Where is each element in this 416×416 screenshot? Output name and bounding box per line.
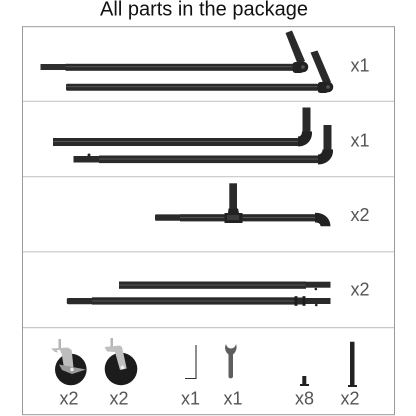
panel: small parts <box>51 338 360 408</box>
quantity: x2 <box>110 388 129 408</box>
panel: elbow pipes <box>53 108 370 164</box>
lower angled pipe <box>66 50 333 93</box>
upper elbow pipe <box>53 108 312 146</box>
icon: long bolt <box>348 342 357 387</box>
panel: angled pipes <box>40 30 370 93</box>
quantity: x2 <box>340 388 360 408</box>
quantity: x1 <box>350 131 370 151</box>
quantity: x1 <box>350 56 370 76</box>
panel: straight pipes <box>67 280 370 306</box>
icon: short bolt <box>300 376 309 386</box>
upper straight pipe <box>119 282 330 290</box>
lower elbow pipe <box>74 125 333 164</box>
quantity: x8 <box>295 388 314 408</box>
quantity: x1 <box>224 388 243 408</box>
icon: wrench <box>225 344 237 378</box>
upper angled pipe <box>40 30 308 73</box>
icon: braked caster wheel <box>51 339 87 385</box>
quantity: x2 <box>350 205 370 225</box>
panel: T pipe <box>155 183 370 226</box>
quantity: x2 <box>350 280 370 300</box>
icon: caster wheel <box>104 338 137 385</box>
icon: allen key <box>185 345 196 378</box>
lower straight pipe <box>67 296 331 306</box>
quantity: x1 <box>181 388 200 408</box>
T-shaped pipe <box>155 183 330 226</box>
quantity: x2 <box>60 388 79 408</box>
